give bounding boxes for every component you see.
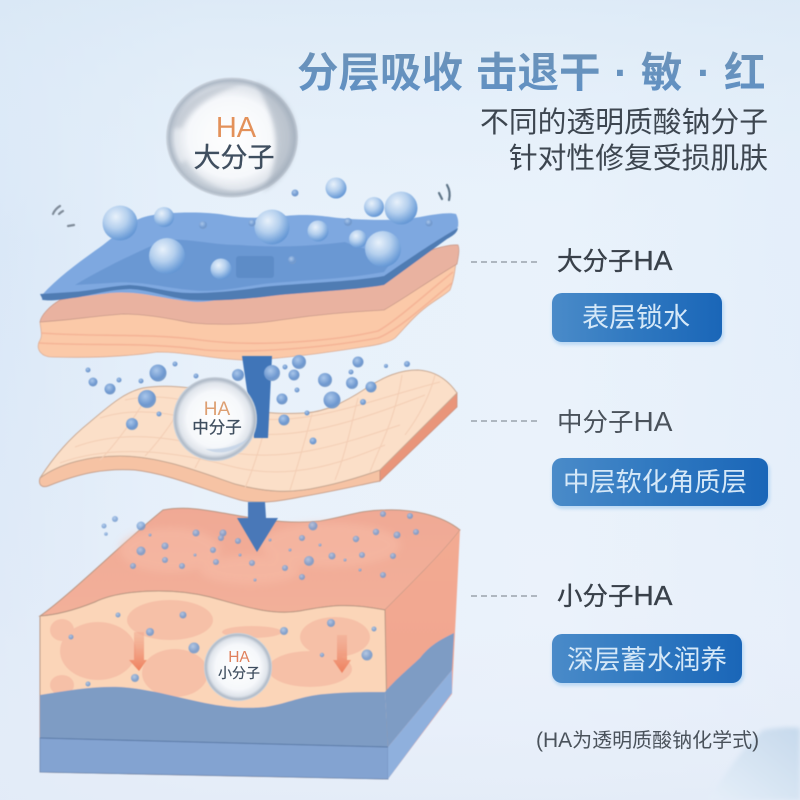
icon: small molecule HA sphere bbox=[204, 633, 272, 701]
icon: large molecule HA sphere: 大分子 bbox=[194, 143, 274, 173]
label: large molecule HA: 大分子HA bbox=[557, 245, 673, 276]
label: medium molecule HA: 中分子HA bbox=[557, 406, 673, 437]
title: 红 bbox=[724, 49, 766, 96]
title: · bbox=[697, 49, 711, 96]
icon: large molecule HA sphere: HA bbox=[216, 112, 257, 144]
blue front edge bbox=[40, 224, 458, 300]
blue bottom layer front bbox=[40, 738, 388, 779]
footnote: (HA为透明质酸钠化学式) bbox=[536, 729, 759, 752]
icon: medium molecule HA sphere bbox=[173, 377, 257, 461]
subtitle text block bbox=[480, 107, 768, 175]
title: 敏 bbox=[641, 49, 683, 96]
panel: middle skin layer bbox=[39, 370, 457, 502]
button: surface water lock: 表层锁水 bbox=[582, 303, 690, 333]
icon: large molecule HA sphere bbox=[166, 78, 298, 198]
top face blue specks bbox=[102, 511, 419, 582]
arrow: orange down right bbox=[333, 635, 351, 673]
title bbox=[297, 49, 766, 96]
icon: medium molecule HA sphere: 中分子 bbox=[192, 418, 242, 437]
skin grid lines bbox=[60, 375, 440, 490]
button: mid layer softening: 中层软化角质层 bbox=[563, 467, 747, 497]
front face blue specks bbox=[68, 612, 376, 686]
right side face bbox=[385, 530, 460, 779]
top face blotches bbox=[120, 523, 400, 584]
top surface bbox=[40, 370, 457, 491]
dashed connector: medium bbox=[471, 420, 541, 422]
blue top surface bbox=[42, 212, 458, 302]
dashed connector: small bbox=[471, 595, 541, 597]
button: surface water lock bbox=[552, 293, 724, 345]
title: · bbox=[614, 49, 628, 96]
water drops around middle layer bbox=[86, 355, 410, 444]
arrow: lower blue arrow bbox=[237, 502, 278, 552]
icon: small molecule HA sphere: HA bbox=[228, 649, 250, 666]
button: mid layer softening bbox=[552, 458, 770, 509]
icon: small molecule HA sphere: 小分子 bbox=[218, 665, 260, 681]
arrow: orange down left bbox=[129, 632, 147, 671]
fat cell lobes bbox=[50, 600, 370, 697]
arrow: upper blue arrow stem bbox=[242, 356, 272, 438]
subtitle text block: 针对性修复受损肌肤 bbox=[509, 143, 768, 175]
icon: medium molecule HA sphere: HA bbox=[204, 399, 231, 420]
dashed connector: large bbox=[471, 261, 541, 263]
front edge band bbox=[39, 456, 380, 502]
blue lower tissue bbox=[40, 687, 388, 748]
pink middle layer bbox=[40, 245, 459, 324]
panel: bottom skin block bbox=[40, 508, 460, 779]
button: deep layer hydration: 深层蓄水润养 bbox=[567, 645, 727, 675]
front face bbox=[40, 591, 388, 779]
button: deep layer hydration bbox=[552, 634, 744, 686]
label: small molecule HA: 小分子HA bbox=[557, 580, 673, 611]
side edge bbox=[380, 393, 457, 481]
corner bubble bbox=[708, 727, 800, 800]
title: 击退干 bbox=[476, 49, 601, 96]
blue side bottom layer bbox=[388, 670, 452, 779]
blue inner shade bbox=[75, 240, 400, 291]
orange lower layer bbox=[38, 250, 456, 360]
panel: top skin layer bbox=[38, 212, 459, 360]
title: 分层吸收 bbox=[297, 49, 463, 96]
blue side tissue bbox=[385, 633, 454, 747]
water drop balls on top layer bbox=[53, 178, 450, 280]
subtitle text block: 不同的透明质酸钠分子 bbox=[480, 107, 768, 139]
top face bbox=[40, 508, 460, 616]
